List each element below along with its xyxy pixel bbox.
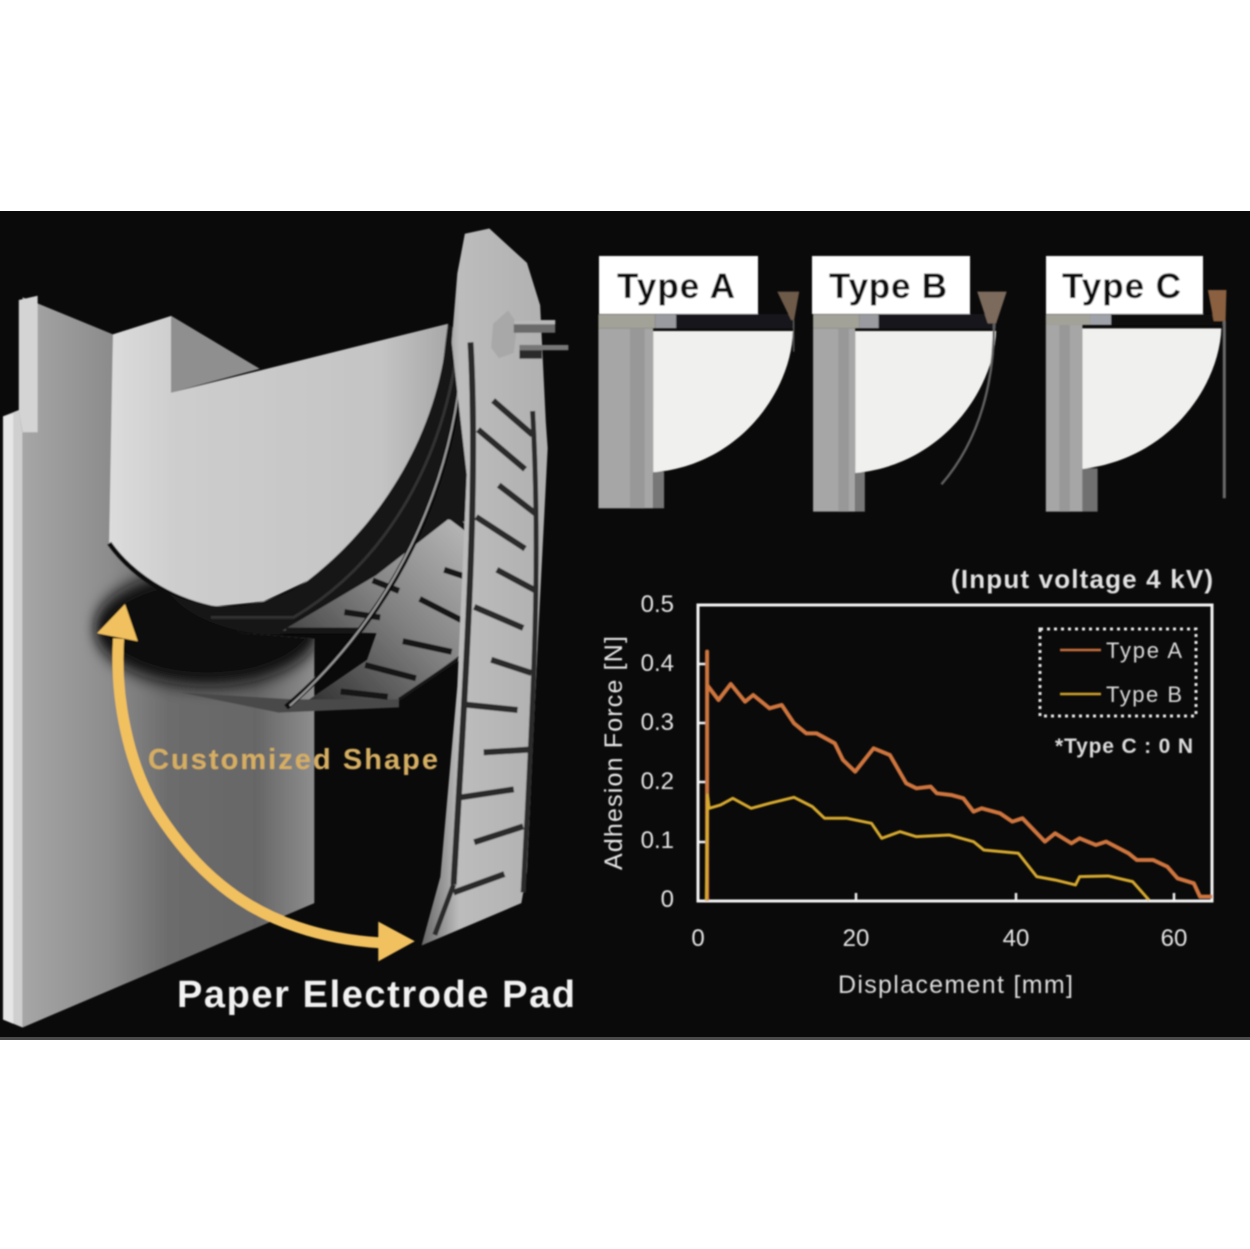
legend <box>1040 629 1196 716</box>
panel: Type C photo <box>1046 256 1226 512</box>
note: Type C zero force: *Type C : 0 N <box>1055 735 1193 758</box>
x axis tick labels: 0 <box>691 925 705 952</box>
label: Type A <box>599 256 758 314</box>
label: Type A: Type A <box>617 267 735 306</box>
series: Type A <box>707 652 1212 901</box>
label: Type C <box>1046 256 1203 314</box>
chart: adhesion force vs displacement <box>600 564 1213 999</box>
dark background band <box>0 211 1250 1037</box>
x axis tick labels <box>691 925 1187 952</box>
arrow: customized shape double arrow <box>97 604 415 961</box>
y axis tick labels: 0.3 <box>641 709 674 736</box>
legend: Type A <box>1106 638 1182 663</box>
panel: Type A photo <box>598 256 799 508</box>
plot frame and ticks <box>698 605 1212 901</box>
y axis tick labels: 0.4 <box>641 650 674 677</box>
label: Customized Shape: Customized Shape <box>148 744 438 776</box>
y axis tick labels: 0.1 <box>641 827 674 854</box>
photo: Type A holder <box>598 292 799 508</box>
photo: Type C holder <box>1046 290 1226 512</box>
bent paper electrode pads <box>169 324 472 713</box>
x axis title: Displacement [mm] <box>838 971 1073 999</box>
y axis tick labels: 0 <box>661 886 674 913</box>
label: Type C: Type C <box>1062 267 1181 306</box>
y axis tick labels: 0.5 <box>641 591 674 618</box>
wall and curved substrate <box>3 296 448 1027</box>
series: Type B <box>706 795 1149 901</box>
photo: Type B holder <box>813 292 1007 512</box>
x axis tick labels: 20 <box>843 925 869 952</box>
x axis tick labels: 40 <box>1003 925 1029 952</box>
note: input voltage: (Input voltage 4 kV) <box>951 564 1213 594</box>
label: Type B: Type B <box>829 267 947 306</box>
hanging paper electrode pad with serpentine pattern <box>422 229 548 945</box>
panel: Type B photo <box>812 256 1007 512</box>
y axis title: Adhesion Force [N] <box>600 636 628 870</box>
y axis tick labels: 0.2 <box>641 768 674 795</box>
label: Type B <box>812 256 970 314</box>
legend: Type B <box>1106 682 1182 707</box>
panel: 3D illustration of curved wall and paper electrode pad <box>3 229 575 1027</box>
label: Paper Electrode Pad: Paper Electrode Pad <box>177 974 575 1016</box>
x axis tick labels: 60 <box>1161 925 1187 952</box>
y axis tick labels <box>641 591 674 913</box>
icon: bolt <box>491 311 568 359</box>
